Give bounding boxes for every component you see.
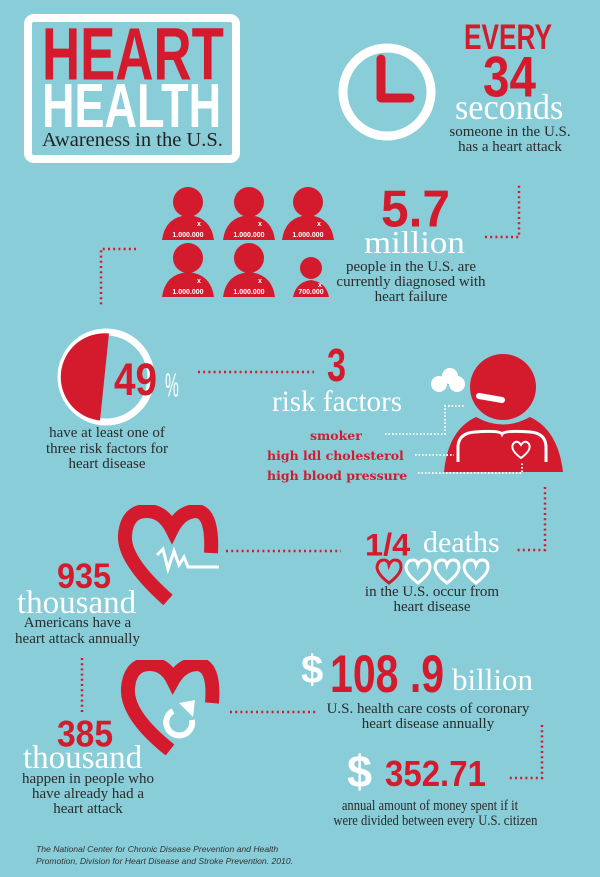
stat: 935 thousand: thousand — [17, 585, 136, 621]
stat: 3 risk factors — [267, 340, 407, 483]
icon: heart with ecg — [118, 505, 219, 605]
stat: $352.71 — [333, 746, 538, 829]
text: 49% description — [46, 425, 168, 472]
stat: 935 thousand: Americans have a — [24, 615, 131, 631]
stat: 935 thousand — [15, 558, 140, 647]
stat: 1/4 deaths — [365, 526, 500, 615]
stat: 3 risk factors: risk factors — [272, 385, 402, 418]
stat: 3 risk factors: high ldl cholesterol — [267, 448, 404, 463]
stat: 385 thousand: have already had a — [32, 786, 144, 802]
text: % — [165, 365, 179, 404]
stat: 385 thousand: happen in people who — [22, 771, 154, 787]
title: HEART: HEART — [42, 13, 224, 95]
stat: 1/4 deaths: 1/4 — [365, 526, 410, 562]
stat: 1/4 deaths: deaths — [423, 526, 500, 559]
title: HEALTH: HEALTH — [42, 71, 221, 141]
footer source: Promotion, Division for Heart Disease and Stroke Prevention. 2010. — [36, 856, 293, 866]
stat: 5.7 million: heart failure — [375, 288, 447, 304]
icon: four hearts — [376, 558, 490, 585]
stat: $108.9 billion — [301, 643, 533, 732]
footer source — [36, 844, 293, 866]
stat: 3 risk factors: high blood pressure — [267, 468, 407, 483]
stat: 5.7 million: million — [364, 224, 465, 260]
icon: people grid: 1.000.000 — [292, 232, 324, 239]
stat: 3 risk factors: 3 — [327, 340, 346, 392]
text: 49% description: have at least one of — [49, 425, 165, 441]
icon: people grid: x — [258, 221, 262, 228]
stat: $352.71: 352.71 — [385, 755, 486, 795]
stat: 5.7 million — [336, 178, 486, 304]
title box — [24, 14, 240, 163]
stat: every 34 seconds: 34 — [483, 46, 536, 109]
icon: clock — [338, 44, 436, 140]
icon: people grid: 1.000.000 — [233, 232, 265, 239]
icon: people grid: 1.000.000 — [172, 232, 204, 239]
stat: 5.7 million: currently diagnosed with — [336, 274, 486, 290]
list: risk factors: smoker — [310, 428, 362, 443]
stat: $352.71: were divided between every U.S. citizen — [333, 813, 537, 829]
icon: people grid: 700.000 — [298, 289, 324, 296]
stat: $108.9 billion: $ — [301, 648, 323, 692]
stat: 935 thousand: 935 — [57, 558, 111, 596]
icon: people grid: x — [197, 221, 201, 228]
stat: $108.9 billion: heart disease annually — [362, 716, 494, 732]
stat: $352.71: $ — [347, 746, 372, 797]
stat: every 34 seconds — [449, 18, 571, 154]
stat: $108.9 billion: U.S. health care costs of coronary — [327, 701, 529, 717]
stat: 385 thousand: heart attack — [53, 801, 123, 817]
icon: people grid: 1.000.000 — [233, 289, 265, 296]
stat: 5.7 million: 5.7 — [381, 178, 450, 238]
icon: heart with repeat arrow — [120, 660, 220, 755]
icon: smoking person — [385, 354, 563, 474]
footer source: The National Center for Chronic Disease Prevention and Health — [36, 844, 278, 854]
stat: every 34 seconds: EVERY — [464, 18, 552, 57]
stat: $352.71: annual amount of money spent if it — [342, 798, 518, 814]
stat: every 34 seconds: has a heart attack — [458, 138, 562, 154]
text: 49% description: heart disease — [68, 456, 146, 472]
stat: 385 thousand: 385 — [57, 715, 113, 755]
stat: 49%: 49 — [114, 356, 157, 405]
stat: every 34 seconds: seconds — [455, 87, 563, 127]
stat: 1/4 deaths: heart disease — [393, 599, 471, 615]
icon: pie chart 49% — [58, 328, 154, 426]
icon: people grid: 1.000.000 — [172, 289, 204, 296]
subtitle: Awareness in the U.S. — [42, 129, 223, 151]
icon: people grid: x — [197, 278, 201, 285]
stat: 385 thousand: thousand — [23, 740, 142, 776]
icon: people grid — [162, 187, 334, 297]
stat: $108.9 billion: 108 .9 — [330, 643, 444, 704]
stat: 385 thousand — [22, 715, 154, 817]
stat: 935 thousand: heart attack annually — [15, 631, 140, 647]
stat: 5.7 million: people in the U.S. are — [346, 258, 476, 274]
text: 49% description: three risk factors for — [46, 440, 168, 456]
icon: people grid: x — [317, 221, 321, 228]
stat: every 34 seconds: someone in the U.S. — [449, 124, 571, 140]
icon: people grid: x — [258, 278, 262, 285]
stat: $108.9 billion: billion — [452, 662, 533, 697]
stat: 1/4 deaths: in the U.S. occur from — [365, 584, 499, 600]
icon: people grid: x — [318, 282, 322, 289]
